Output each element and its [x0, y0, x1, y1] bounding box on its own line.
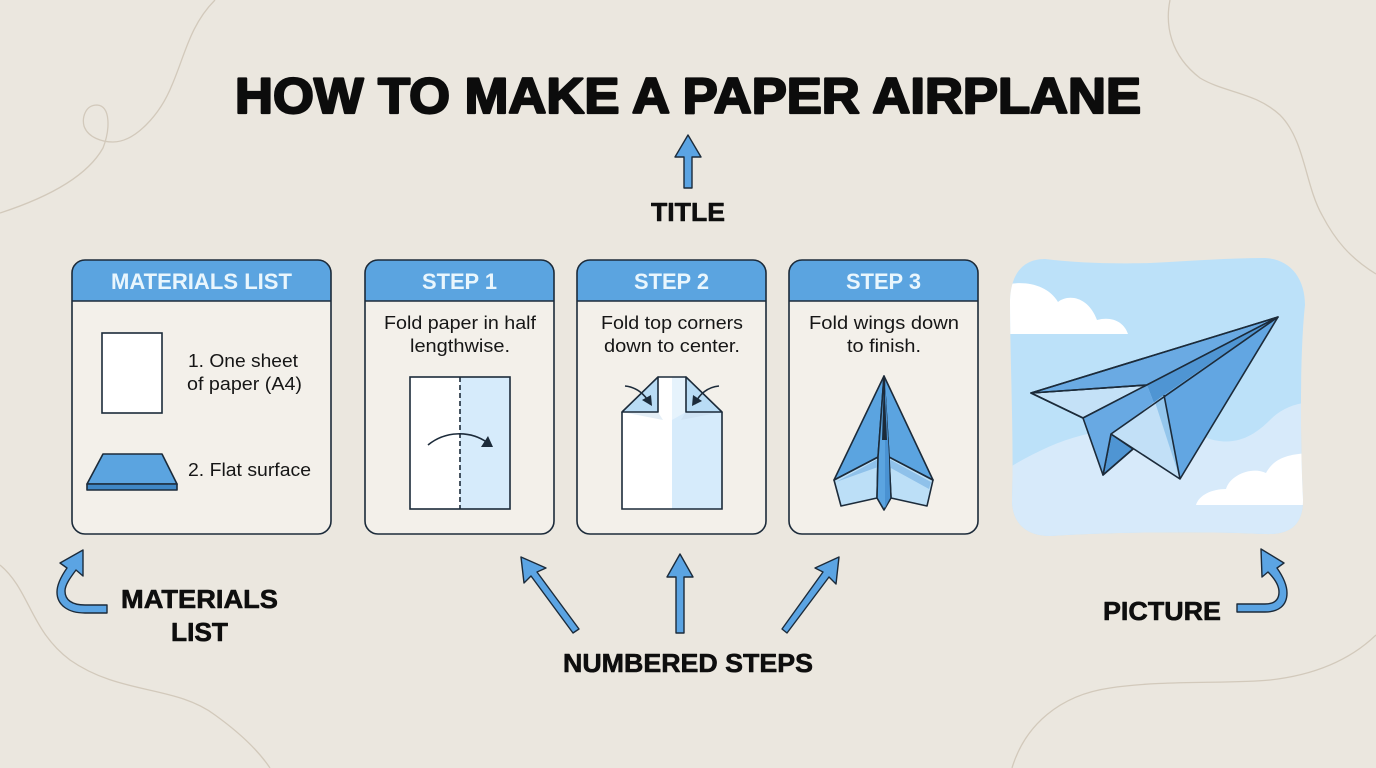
arrow: to picture: [1237, 549, 1287, 612]
panel: step 2: [577, 260, 766, 534]
title: HOW TO MAKE A PAPER AIRPLANE: [235, 68, 1141, 124]
text: step 1 instruction: Fold paper in half: [384, 312, 537, 333]
label: title: TITLE: [651, 197, 725, 227]
diagram: finished plane: [834, 376, 933, 510]
text: step 1 instruction: lengthwise.: [410, 335, 510, 356]
haze clouds: [1005, 402, 1310, 540]
heading: step 1: STEP 1: [422, 269, 497, 294]
label: materials list: MATERIALS: [121, 584, 278, 614]
text: step 2 instruction: down to center.: [604, 335, 740, 356]
airplane: [1031, 317, 1278, 479]
arrow: to step 2: [667, 554, 693, 633]
icon: flat surface: [87, 454, 177, 490]
heading: step 2: STEP 2: [634, 269, 709, 294]
label: numbered steps: NUMBERED STEPS: [563, 648, 813, 678]
panel: step 1: [365, 260, 554, 534]
text: step 3 instruction: Fold wings down: [809, 312, 959, 333]
panel: step 3: [789, 260, 978, 534]
cloud: bottom right: [1196, 453, 1310, 505]
text: step 2 instruction: Fold top corners: [601, 312, 743, 333]
diagram: fold in half: [410, 377, 510, 509]
text: item one: of paper (A4): [187, 373, 302, 394]
cloud: top left: [1005, 283, 1128, 334]
panel: materials list: [72, 260, 331, 534]
text: item two: 2. Flat surface: [188, 459, 311, 480]
text: item one: 1. One sheet: [188, 350, 298, 371]
picture: paper airplane in sky: [1005, 255, 1310, 540]
label: picture: PICTURE: [1103, 596, 1221, 626]
arrow: to step 3: [782, 557, 839, 633]
icon: sheet of paper: [102, 333, 162, 413]
text: step 3 instruction: to finish.: [847, 335, 921, 356]
arrow: to step 1: [521, 557, 579, 633]
heading: materials list: MATERIALS LIST: [111, 269, 293, 294]
heading: step 3: STEP 3: [846, 269, 921, 294]
label: materials list: LIST: [171, 617, 228, 647]
arrow: to materials list: [57, 550, 107, 613]
arrow: to title: [675, 135, 701, 188]
diagram: fold corners: [622, 377, 722, 509]
